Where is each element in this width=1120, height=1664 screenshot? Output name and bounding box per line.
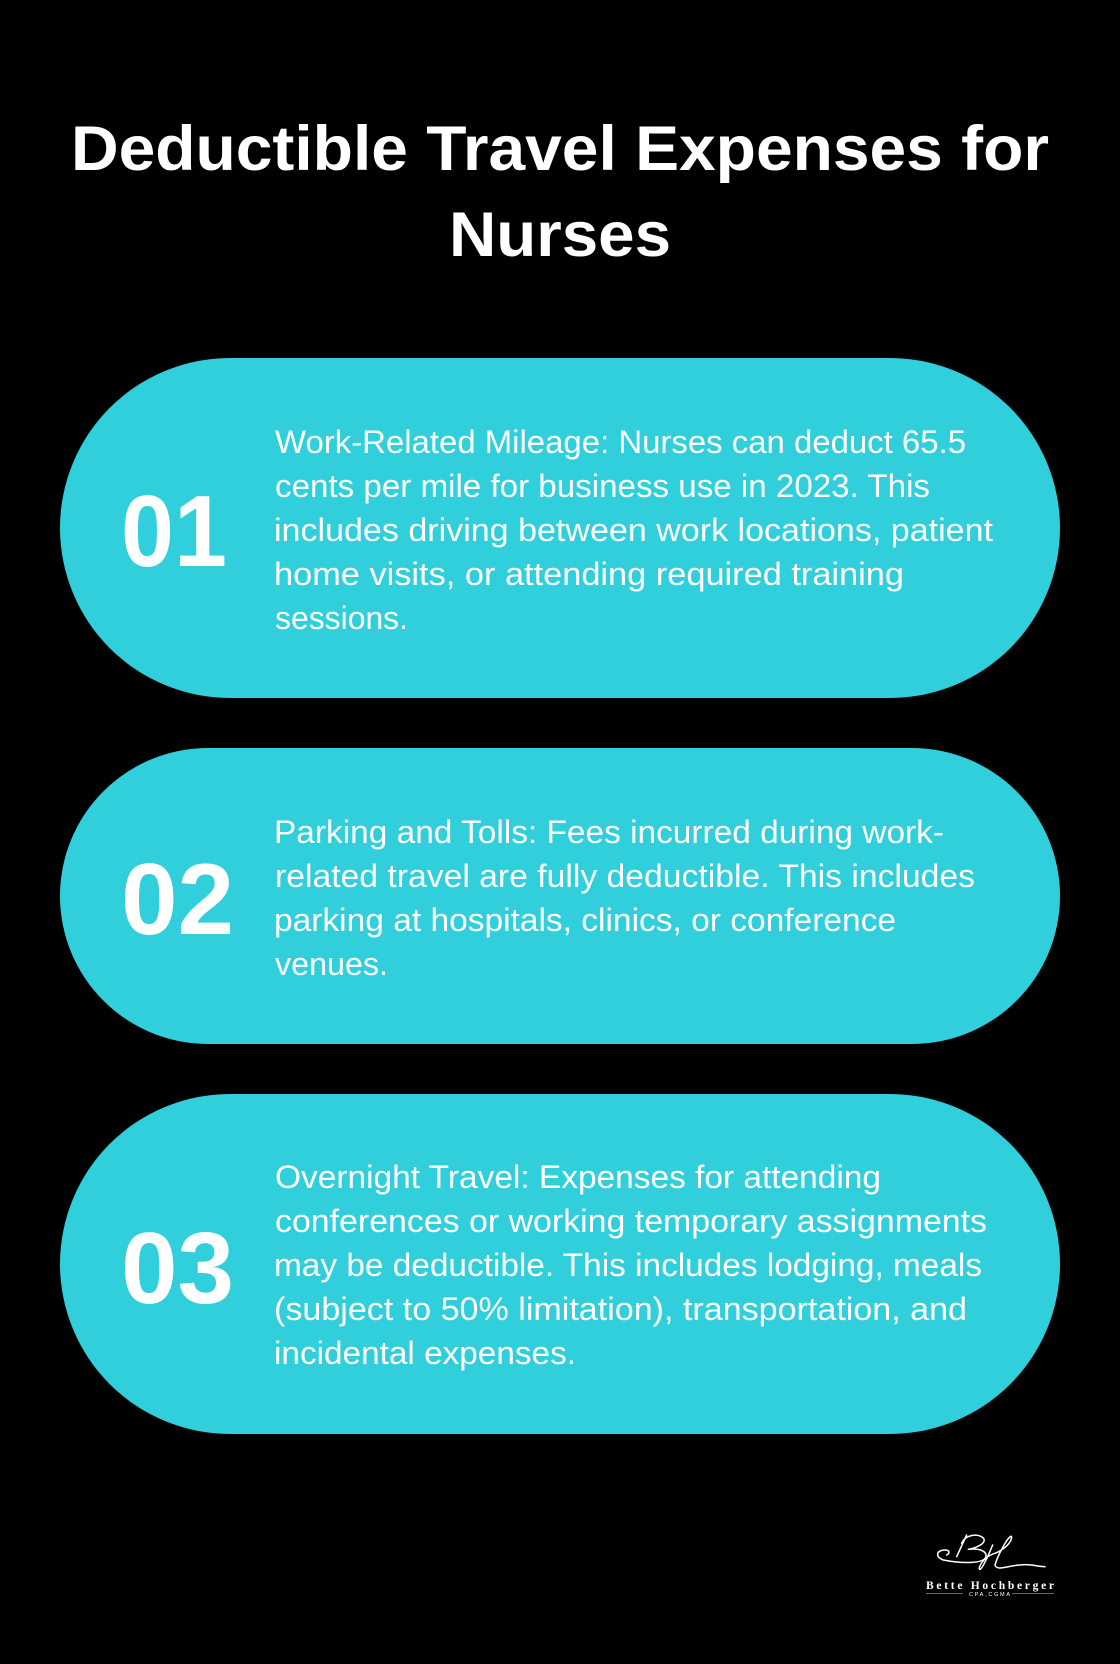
title: Nurses — [449, 200, 671, 270]
number 02: 02 — [121, 844, 234, 956]
number 03: 03 — [121, 1213, 234, 1325]
text block 2: related travel are fully deductible. This includes — [275, 858, 975, 894]
title: Deductible Travel Expenses for — [71, 114, 1049, 184]
text block 1: sessions. — [275, 600, 408, 636]
text block 1: home visits, or attending required training — [274, 556, 904, 592]
pill background 2 — [60, 748, 1060, 1044]
title — [71, 114, 1049, 270]
logo: Bette Hochberger CPA, CGMA — [926, 1535, 1054, 1598]
text block 2 — [274, 814, 975, 982]
panel: work-related mileage — [60, 358, 1060, 698]
icon: BH signature — [938, 1535, 1045, 1569]
logo name: Bette Hochberger — [926, 1580, 1054, 1592]
pill background 3 — [60, 1094, 1060, 1434]
text block 1 — [274, 424, 993, 636]
text block 1: Work-Related Mileage: Nurses can deduct 65.5 — [275, 424, 966, 460]
text block 3: conferences or working temporary assignments — [275, 1203, 987, 1239]
text block 3 — [274, 1159, 987, 1371]
text block 1: cents per mile for business use in 2023. This — [275, 468, 930, 504]
panel: parking and tolls — [60, 748, 1060, 1044]
pill background 1 — [60, 358, 1060, 698]
logo credentials: CPA,CGMA — [969, 1592, 1010, 1598]
text block 3: may be deductible. This includes lodging, meals — [274, 1247, 982, 1283]
number 01: 01 — [121, 476, 227, 588]
panel: overnight travel — [60, 1094, 1060, 1434]
text block 2: venues. — [275, 946, 388, 982]
text block 3: (subject to 50% limitation), transportation, and — [274, 1291, 967, 1327]
text block 2: parking at hospitals, clinics, or conference — [274, 902, 896, 938]
text block 3: Overnight Travel: Expenses for attending — [275, 1159, 881, 1195]
text block 3: incidental expenses. — [274, 1335, 576, 1371]
text block 2: Parking and Tolls: Fees incurred during work- — [274, 814, 944, 850]
text block 1: includes driving between work locations, patient — [274, 512, 993, 548]
